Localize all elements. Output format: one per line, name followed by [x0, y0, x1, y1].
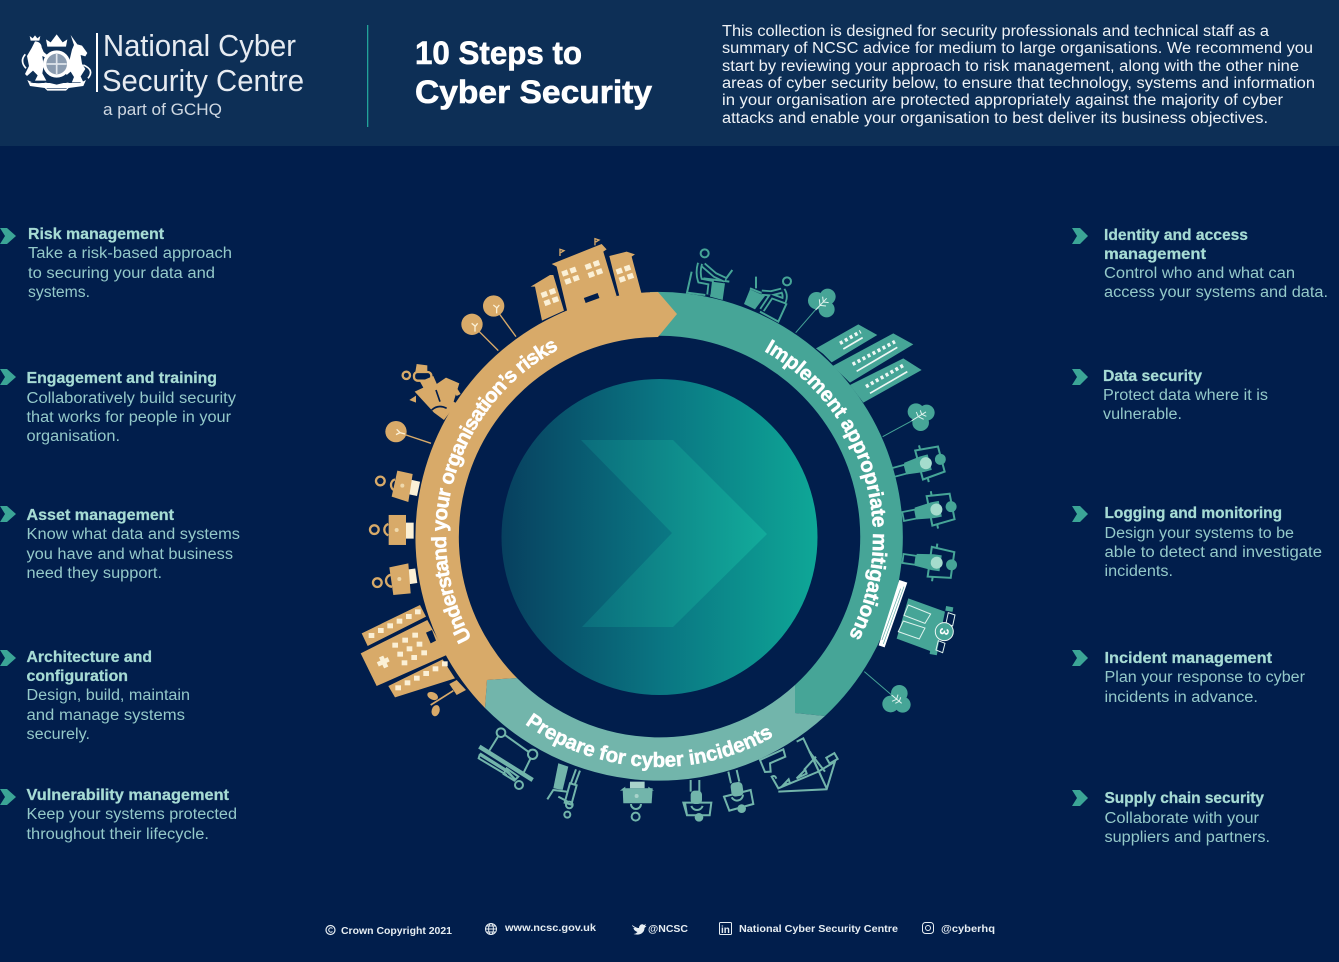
teal illustrations upper — [687, 249, 935, 437]
icon: tree — [796, 289, 836, 333]
icon: globe — [486, 924, 496, 934]
step: data security — [1072, 368, 1268, 423]
ring diagram — [415, 292, 903, 781]
step: risk management: systems. — [28, 284, 90, 301]
central circle with chevron — [502, 379, 818, 695]
logo wordmark — [102, 28, 304, 119]
step: vulnerability management: Keep your systems protected — [26, 806, 237, 823]
icon: copyright — [326, 926, 335, 934]
footer: website: www.ncsc.gov.uk — [504, 922, 596, 934]
step: incident management: incidents in advance. — [1104, 689, 1258, 706]
icon: data bars — [816, 324, 922, 403]
step: asset management: Asset management — [26, 507, 174, 524]
step: incident management: Incident management — [1104, 650, 1272, 667]
light teal illustrations left — [479, 728, 654, 821]
panel: right steps — [1072, 227, 1328, 846]
step: architecture and configuration: Design, build, maintain — [26, 687, 190, 704]
footer: instagram handle: @cyberhq — [941, 923, 995, 935]
step: supply chain security: suppliers and partners. — [1104, 829, 1270, 846]
title: Cyber Security — [415, 74, 652, 110]
step: logging and monitoring: Design your systems to be — [1104, 525, 1294, 542]
step: risk management — [0, 226, 232, 301]
icon: tree — [883, 403, 935, 437]
step: identity and access management: access your systems and data. — [1104, 284, 1328, 301]
step: vulnerability management: Vulnerability management — [26, 787, 229, 804]
step: logging and monitoring — [1072, 505, 1322, 580]
logo wordmark: Security Centre — [102, 63, 304, 98]
icon: person at desk — [744, 277, 791, 322]
intro paragraph: This collection is designed for security professionals and technical staff as a — [722, 23, 1269, 40]
step: risk management: Risk management — [28, 226, 164, 243]
icon: monitor figure four — [683, 780, 711, 822]
header divider — [367, 25, 368, 127]
icon: school building — [531, 239, 642, 321]
icon: tree — [864, 672, 911, 713]
step: incident management: Plan your response to cyber — [1104, 669, 1305, 686]
icon: linkedin: in — [721, 925, 730, 936]
ring segment: understand — [415, 292, 677, 708]
logo divider — [96, 33, 98, 92]
step: identity and access management: management — [1104, 246, 1206, 263]
logo: coat of arms — [22, 34, 91, 91]
step: supply chain security: Collaborate with your — [1104, 810, 1259, 827]
step: architecture and configuration: configuration — [26, 668, 128, 685]
step: architecture and configuration: and manage systems — [26, 707, 185, 724]
step: identity and access management — [1072, 227, 1328, 301]
footer: twitter handle: @NCSC — [648, 923, 688, 935]
ring label: implement: Implement appropriate mitigations — [764, 339, 888, 640]
icon: plant — [426, 680, 466, 717]
icon: bench machine — [479, 728, 537, 789]
icon: desk figure three — [373, 563, 417, 595]
intro paragraph: start by reviewing your approach to risk management, along with the other nine — [722, 58, 1299, 75]
step: engagement and training: organisation. — [26, 428, 120, 445]
logo wordmark: a part of GCHQ — [103, 100, 222, 119]
step: logging and monitoring: able to detect and investigate — [1104, 544, 1322, 561]
step: architecture and configuration: securely. — [26, 726, 90, 743]
icon: desk figure one — [376, 471, 420, 502]
icon: crane — [760, 738, 838, 792]
step: risk management: to securing your data and — [28, 265, 215, 282]
ring label: understand: Understand your organisation’s risks — [430, 341, 558, 644]
step: supply chain security: Supply chain security — [1104, 790, 1264, 807]
step: asset management: Know what data and systems — [26, 526, 240, 543]
icon: delivery scooter — [403, 364, 461, 420]
tan illustrations lower — [361, 563, 466, 717]
icon: instagram — [922, 922, 934, 934]
step: identity and access management: Control who and what can — [1104, 265, 1295, 282]
intro paragraph: areas of cyber security below, to ensure that technology, systems and information — [722, 75, 1315, 92]
icon: monitor figure two — [899, 487, 960, 535]
icon: monitor figure one — [888, 440, 951, 490]
icon: linkedin — [720, 922, 732, 936]
step: engagement and training: Collaboratively build security — [26, 390, 236, 407]
intro paragraph — [722, 23, 1315, 127]
icon: parcel box — [620, 782, 654, 821]
icon: tree three — [385, 421, 431, 443]
title — [415, 35, 652, 110]
intro paragraph: summary of NCSC advice for medium to large organisations. We recommend you — [722, 40, 1313, 57]
icon: tree two — [483, 295, 516, 337]
intro paragraph: attacks and enable your organisation to best deliver its business objectives. — [722, 110, 1268, 127]
header band — [0, 0, 1339, 146]
step: identity and access management: Identity and access — [1104, 227, 1248, 244]
title: 10 Steps to — [415, 35, 582, 71]
intro paragraph: in your organisation are protected appropriately against the majority of cyber — [722, 92, 1283, 109]
footer: copyright text: Crown Copyright 2021 — [341, 925, 452, 937]
step: engagement and training: that works for people in your — [26, 409, 231, 426]
ring segment: implement — [650, 292, 903, 716]
step: asset management: you have and what business — [26, 546, 233, 563]
step: engagement and training: Engagement and training — [26, 370, 217, 387]
ring segment: prepare — [485, 678, 825, 781]
step: architecture and configuration — [0, 649, 190, 743]
step: asset management: need they support. — [26, 565, 162, 582]
icon: hospital — [361, 605, 455, 697]
step: logging and monitoring: incidents. — [1104, 563, 1173, 580]
tan illustrations upper — [370, 239, 642, 545]
step: risk management: Take a risk-based approach — [28, 245, 232, 262]
icon: bank with meter: 3 — [936, 627, 951, 636]
panel: left steps — [0, 226, 240, 843]
step: incident management — [1072, 650, 1305, 706]
step: vulnerability management: throughout their lifecycle. — [26, 826, 209, 843]
ring label: prepare: Prepare for cyber incidents — [526, 712, 772, 771]
icon: tree one — [461, 314, 498, 351]
icon: monitor figure five — [724, 770, 753, 813]
step: data security: Protect data where it is — [1103, 387, 1268, 404]
icon: monitor figure three — [900, 539, 960, 584]
step: asset management — [0, 506, 240, 582]
step: data security: Data security — [1103, 368, 1202, 385]
step: architecture and configuration: Architecture and — [26, 649, 152, 666]
step: supply chain security — [1072, 790, 1270, 846]
icon: hand tool — [547, 763, 580, 818]
step: data security: vulnerable. — [1103, 406, 1182, 423]
step: logging and monitoring: Logging and monitoring — [1104, 505, 1282, 522]
footer: linkedin name: National Cyber Security Centre — [739, 923, 898, 935]
logo wordmark: National Cyber — [103, 28, 296, 63]
icon: twitter bird — [632, 924, 646, 935]
teal illustrations lower — [864, 580, 955, 713]
icon: person at laptop — [687, 249, 732, 300]
icon: desk figure two — [370, 515, 414, 545]
light teal illustrations right — [683, 738, 838, 822]
footer — [326, 922, 995, 937]
step: engagement and training — [0, 369, 236, 445]
step: vulnerability management — [0, 787, 237, 843]
